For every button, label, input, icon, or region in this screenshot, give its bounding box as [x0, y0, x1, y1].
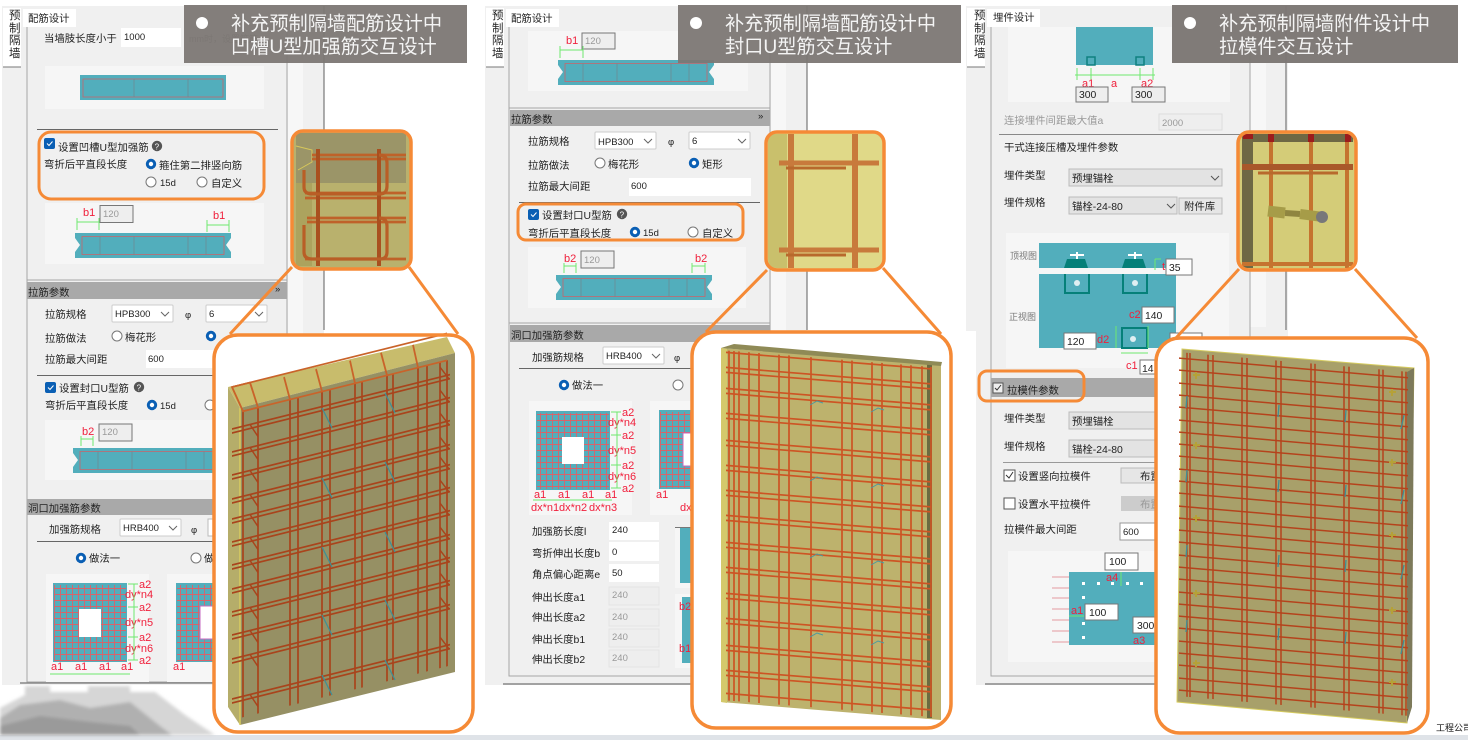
section header: opening reinforcement	[27, 499, 217, 515]
diagram: opening method one: dy*n4	[608, 417, 636, 429]
tie bar parameters: 拉筋规格	[45, 308, 87, 321]
diagram: embed spacing: a2	[1141, 78, 1153, 90]
tab: rebar design: 配筋设计	[511, 12, 553, 25]
title: tie-mould: 拉模件交互设计	[1219, 36, 1353, 58]
wall-limb length row: 当墙肢长度小于	[44, 32, 117, 45]
opening rebar lengths: 弯折伸出长度b	[532, 547, 600, 560]
diagram: tie-mould layout: a4	[1106, 572, 1118, 584]
diagram: opening method two: a1	[656, 489, 668, 501]
diagram: embed views: 14	[1142, 364, 1154, 375]
opening rebar spec: φ	[191, 525, 197, 536]
tie-mould parameters: 拉模件最大间距	[1004, 523, 1077, 536]
diagram: embed spacing: 300	[1079, 90, 1097, 101]
opening rebar lengths: 50	[612, 568, 623, 579]
diagram: opening method one: a2	[139, 602, 151, 614]
tie bar parameters: 矩形	[702, 158, 723, 171]
tie-mould parameters: 埋件类型	[1004, 412, 1046, 425]
tie bar parameters: 拉筋最大间距	[45, 353, 107, 366]
section header: tie bars	[510, 110, 770, 126]
panel: tie-mould embed dialog	[966, 6, 1288, 685]
diagram: embed spacing: a	[1111, 78, 1118, 90]
preview: b1 section	[528, 31, 748, 91]
closing U-bar option: 弯折后平直段长度	[528, 227, 611, 240]
diagram: opening method two	[650, 401, 695, 515]
diagram: opening method one: a2	[139, 632, 151, 644]
diagram: opening method one: dy*n5	[125, 617, 153, 629]
callout: groove U-bar option highlight	[39, 132, 264, 199]
tab: vertical: 墙	[492, 46, 504, 60]
diagram: embed views: d2	[1097, 334, 1109, 346]
section header: tie bars: »	[758, 111, 763, 122]
tie bar parameters	[528, 132, 751, 196]
max spacing row: 连接埋件间距最大值a	[1004, 114, 1104, 127]
zoom detail: tie-mould anchor	[1238, 132, 1356, 270]
diagram: embed spacing	[1008, 27, 1230, 102]
closing U-bar option: 自定义	[702, 227, 733, 240]
panel: 3D wall model, tie-mould	[1156, 338, 1428, 733]
preview: b2 section: b2	[695, 253, 707, 265]
callout: closing U-bar option highlight	[518, 204, 743, 240]
diagram: opening method one: a1	[51, 661, 63, 673]
diagram: opening method one: a2	[622, 460, 634, 472]
tab: vertical	[486, 8, 504, 67]
opening rebar lengths: 240	[612, 653, 628, 664]
diagram: opening method one	[529, 401, 636, 515]
diagram: opening method two: a1	[173, 661, 185, 673]
tie bar parameters: 6	[692, 136, 697, 147]
diagram: opening method one: a1	[121, 661, 133, 673]
panel: closing U-bar dialog	[485, 6, 807, 685]
groove U-bar option: 弯折后平直段长度	[44, 158, 127, 171]
title: tie-mould	[1172, 5, 1458, 63]
tab: vertical: 墙	[9, 46, 21, 60]
preview: b1 section: b1	[566, 35, 578, 47]
closing U-bar option: 设置封口U型筋	[59, 382, 129, 395]
opening rebar spec: 加强筋规格	[532, 351, 585, 364]
diagram: embed spacing: a1	[1082, 78, 1094, 90]
diagram: opening method one: dy*n6	[608, 471, 636, 483]
title: closing U-bar	[678, 5, 961, 63]
opening rebar lengths: 伸出长度a1	[532, 591, 585, 604]
diagram: embed views: c2	[1129, 309, 1141, 321]
opening rebar spec: HRB400	[606, 351, 642, 362]
diagram: opening method two	[167, 574, 217, 682]
opening rebar lengths: 加强筋长度l	[532, 525, 586, 538]
panel: 3D wall model, closing U-bar	[692, 332, 951, 728]
tab: vertical: 预	[9, 9, 21, 22]
opening rebar spec: HRB400	[123, 523, 159, 534]
bottom strip	[0, 735, 1468, 740]
groove U-bar option: 箍住第二排竖向筋	[159, 159, 242, 172]
tab: embed design	[987, 9, 1040, 27]
section header: tie bars: 拉筋参数	[511, 113, 553, 126]
closing U-bar option: 15d	[643, 228, 659, 239]
tie-mould parameters: 锚栓-24-80	[1072, 443, 1123, 456]
diagram: opening method one: dx*n3	[589, 502, 617, 514]
tie bar parameters	[45, 305, 267, 368]
diagram: embed views: 140	[1145, 311, 1163, 322]
opening rebar spec: 做法一	[89, 552, 120, 565]
preview: b2 section: 120	[584, 255, 600, 266]
diagram: opening method one: a1	[605, 489, 617, 501]
callout: tie-mould header highlight	[979, 371, 1084, 401]
title: closing U-bar: 补充预制隔墙配筋设计中	[725, 13, 936, 35]
opening rebar lengths: 伸出长度b1	[532, 633, 585, 646]
diagram: embed spacing: 300	[1135, 90, 1153, 101]
decorative city photo	[0, 686, 215, 735]
groove U-bar option	[44, 138, 242, 190]
diagram: embed views	[1006, 233, 1229, 375]
diagram: embed views: t	[1162, 261, 1165, 273]
tab: vertical: 隔	[492, 34, 504, 47]
diagram: tie-mould layout: 100	[1109, 557, 1127, 568]
diagram: embed views: c1	[1126, 360, 1138, 372]
tab: vertical: 隔	[974, 34, 986, 47]
section header: tie bars: »	[275, 284, 280, 295]
section header: opening reinforcement	[510, 325, 770, 342]
diagram: embed views: 顶视图	[1010, 250, 1037, 261]
tie-mould parameters: 预埋锚栓	[1072, 415, 1114, 428]
section header: tie-mould parameters	[991, 378, 1161, 397]
preview: b2 section: b2	[564, 253, 576, 265]
dry connection parameters: 附件库	[1184, 200, 1215, 213]
opening rebar spec: φ	[674, 353, 680, 364]
opening rebar lengths: 240	[612, 612, 628, 623]
title: groove U-bar: 凹槽U型加强筋交互设计	[231, 36, 437, 58]
section header: opening reinforcement: 洞口加强筋参数	[28, 502, 101, 515]
opening rebar lengths: 0	[612, 547, 617, 558]
tie-mould parameters: 设置竖向拉模件	[1018, 470, 1091, 483]
title: groove U-bar	[184, 5, 467, 63]
tab: vertical: 隔	[9, 34, 20, 47]
opening rebar lengths: 角点偏心距离e	[532, 568, 600, 581]
closing U-bar option: 弯折后平直段长度	[45, 399, 128, 412]
connector lines: groove U-bar	[230, 267, 458, 334]
tie bar parameters: φ	[668, 137, 674, 148]
preview: b2 section	[45, 420, 229, 480]
opening rebar lengths	[532, 522, 659, 667]
tie bar parameters: 600	[631, 181, 647, 192]
opening rebar lengths: 伸出长度b2	[532, 653, 585, 666]
closing U-bar option	[528, 209, 733, 240]
diagram: embed views: 正视图	[1009, 311, 1036, 322]
diagram: tie-mould layout: 100	[1089, 608, 1107, 619]
groove U-bar option: 自定义	[211, 177, 242, 190]
partial right diagrams: b1	[679, 643, 691, 655]
preview: b1 section: b1	[213, 210, 225, 222]
tie bar parameters: HPB300	[598, 137, 633, 148]
preview: b2 section: b2	[82, 426, 94, 438]
section header: tie-mould parameters: 拉模件参数	[1007, 384, 1060, 397]
dry connection parameters: 埋件规格	[1004, 196, 1046, 209]
diagram: opening method one: dy*n6	[125, 643, 153, 655]
diagram: opening method one: a2	[622, 430, 634, 442]
wall-limb length row: mm时，设置箍筋	[189, 33, 258, 44]
opening rebar spec: 做法一	[572, 379, 603, 392]
preview: b1 section: 120	[585, 36, 601, 47]
connector lines: tie-mould	[1176, 269, 1417, 338]
tie-mould parameters: 600	[1123, 527, 1139, 538]
opening rebar lengths: 伸出长度a2	[532, 611, 585, 624]
diagram: embed views: 120	[1067, 337, 1085, 348]
title: tie-mould: 补充预制隔墙附件设计中	[1219, 13, 1430, 35]
tab: vertical: 制	[9, 22, 20, 35]
opening rebar spec: 做	[204, 552, 215, 565]
tie bar parameters: 6	[209, 309, 214, 320]
opening rebar lengths: 240	[612, 525, 628, 536]
tab: rebar design	[23, 9, 76, 27]
diagram: opening method one: dy*n5	[608, 445, 636, 457]
groove U-bar option: 设置凹槽U型加强筋	[58, 141, 149, 154]
section header: tie bars: 拉筋参数	[28, 286, 70, 299]
section header: opening reinforcement: 洞口加强筋参数	[511, 329, 584, 342]
tie-mould parameters: 布置	[1140, 471, 1161, 483]
dry connection parameters: 预埋锚栓	[1072, 172, 1114, 185]
preview: b1 section: b1	[83, 207, 95, 219]
closing U-bar option	[45, 382, 215, 412]
preview: flat section	[45, 66, 264, 109]
tab: vertical: 预	[974, 9, 986, 22]
max spacing row: 2000	[1162, 118, 1183, 129]
tab: vertical: 制	[974, 22, 986, 35]
diagram: embed views: 35	[1169, 263, 1181, 274]
preview: b1 section: 120	[103, 209, 119, 220]
tie-mould parameters: 布置	[1140, 499, 1161, 511]
opening rebar spec	[519, 347, 692, 392]
closing U-bar option: 设置封口U型筋	[542, 209, 612, 222]
wall-limb length row	[44, 28, 258, 47]
preview: b1 section	[45, 203, 264, 264]
tie bar parameters: 拉筋做法	[528, 159, 570, 172]
zoom detail: closing U-bar	[766, 132, 884, 270]
dry connection parameters: 埋件类型	[1004, 169, 1046, 182]
tie bar parameters: 拉筋最大间距	[528, 180, 590, 193]
max spacing row	[1004, 114, 1222, 130]
preview: b2 section	[528, 247, 746, 308]
tab: vertical: 制	[492, 22, 504, 35]
partial right diagrams: b2	[679, 601, 691, 613]
tie bar parameters: 梅花形	[608, 158, 640, 171]
panel: 3D wall model, groove U-bar	[214, 333, 473, 732]
tab: rebar design: 配筋设计	[28, 12, 70, 25]
diagram: opening method one: a1	[99, 661, 111, 673]
partial right diagrams	[675, 528, 692, 668]
title: closing U-bar: 封口U型筋交互设计	[725, 36, 892, 58]
diagram: tie-mould layout: a3	[1133, 635, 1145, 647]
preview: b2 section: 120	[102, 427, 118, 438]
diagram: opening method one: a1	[534, 489, 546, 501]
closing U-bar option: 15d	[160, 401, 176, 412]
panel: groove U-bar dialog	[2, 6, 324, 685]
section header: tie bars	[27, 282, 287, 299]
diagram: opening method one: a1	[75, 661, 87, 673]
connector lines: closing U-bar	[706, 268, 941, 334]
tab: vertical: 预	[492, 9, 504, 22]
groove U-bar option: 15d	[160, 178, 176, 189]
opening rebar spec	[37, 519, 218, 565]
title: groove U-bar: 补充预制隔墙配筋设计中	[231, 13, 442, 35]
tie bar parameters: 600	[148, 354, 164, 365]
tie bar parameters: 拉筋规格	[528, 135, 570, 148]
diagram: opening method one: a1	[582, 489, 594, 501]
opening rebar lengths: 240	[612, 590, 628, 601]
tab: vertical	[967, 8, 986, 67]
diagram: opening method one	[46, 574, 153, 682]
tie bar parameters: 梅花形	[125, 331, 157, 344]
diagram: opening method one: a2	[622, 483, 634, 495]
dry connection parameters	[1004, 141, 1222, 214]
tie bar parameters: 拉筋做法	[45, 332, 87, 345]
tab: vertical: 墙	[974, 46, 986, 60]
diagram: tie-mould layout	[1008, 551, 1160, 662]
dry connection parameters: 干式连接压槽及埋件参数	[1004, 141, 1119, 154]
diagram: opening method one: dy*n4	[125, 589, 153, 601]
tab: vertical	[3, 8, 21, 67]
diagram: opening method one: a1	[558, 489, 570, 501]
tab: embed design: 埋件设计	[993, 11, 1035, 24]
tie-mould parameters: 设置水平拉模件	[1018, 498, 1091, 511]
diagram: opening method one: a2	[139, 655, 151, 667]
zoom detail: groove U-bar	[292, 131, 411, 269]
tie-mould parameters: 埋件规格	[1004, 440, 1046, 453]
opening rebar spec: 加强筋规格	[49, 523, 102, 536]
dry connection parameters: 锚栓-24-80	[1072, 200, 1123, 213]
diagram: opening method two: dx	[680, 502, 692, 514]
wall-limb length row: 1000	[124, 32, 145, 43]
tab: rebar design	[506, 9, 559, 27]
tie bar parameters: φ	[185, 310, 191, 321]
tie-mould parameters	[1003, 412, 1161, 540]
tie bar parameters: HPB300	[115, 309, 150, 320]
diagram: opening method one: dx*n2	[559, 502, 587, 514]
diagram: tie-mould layout: 300	[1137, 621, 1155, 632]
opening rebar lengths: 240	[612, 632, 628, 643]
diagram: opening method one: a2	[622, 407, 634, 419]
diagram: opening method one: dx*n1	[531, 502, 559, 514]
diagram: tie-mould layout: a1	[1071, 605, 1083, 617]
diagram: opening method one: a2	[139, 579, 151, 591]
